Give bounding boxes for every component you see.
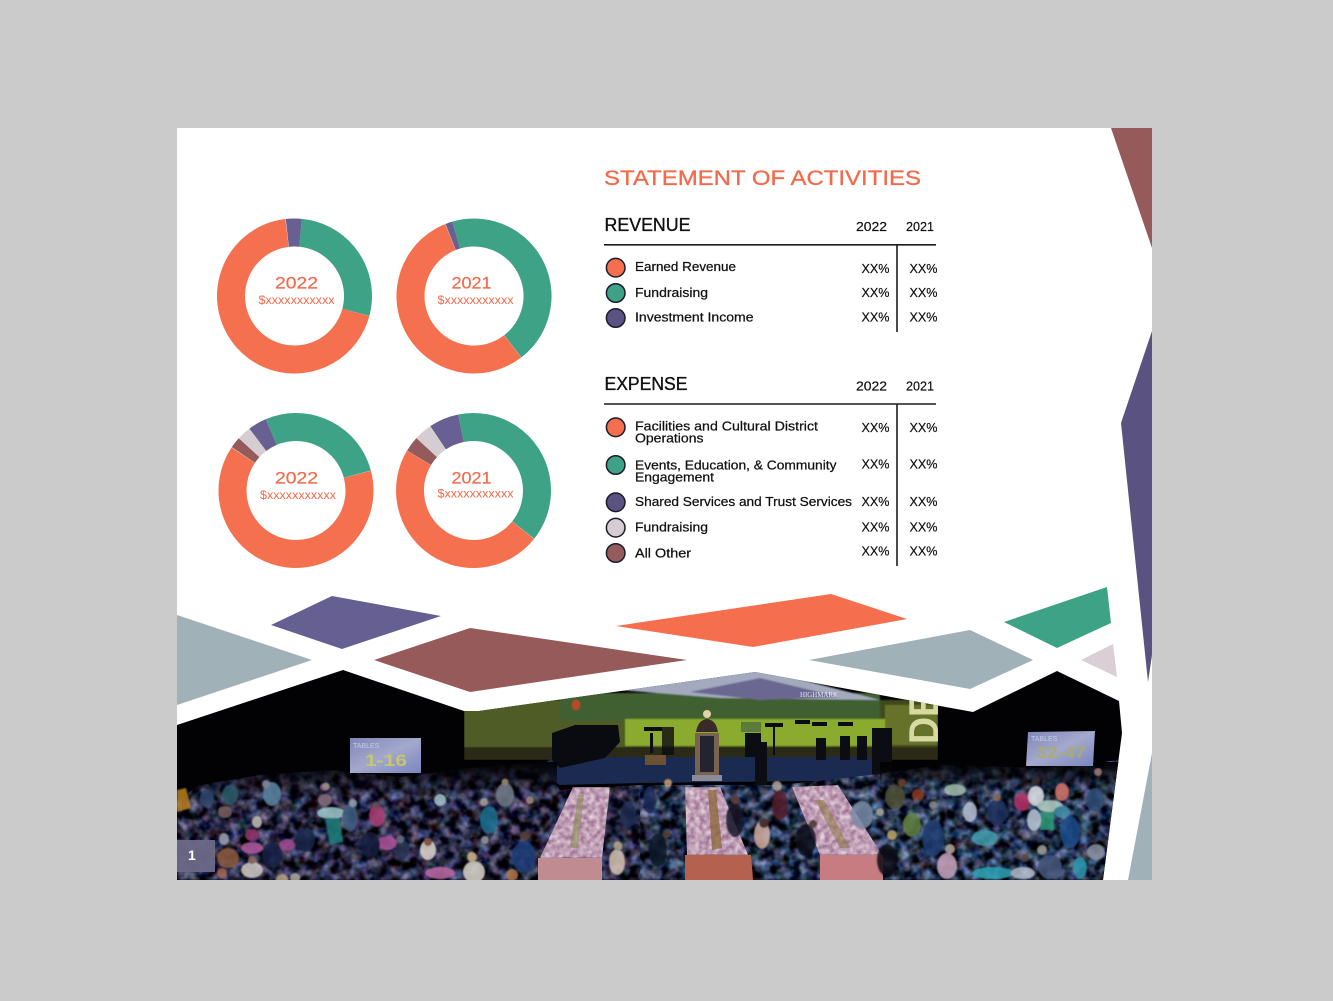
crowd top fade [177, 762, 557, 798]
row: fundraising: XX% [910, 285, 938, 300]
row: events: Events, Education, & Community [635, 457, 837, 472]
row: fundraising: Fundraising [635, 285, 708, 300]
row: earned revenue [606, 258, 938, 277]
crowd top fade right [880, 762, 1120, 792]
expense table [604, 374, 938, 566]
shape: bottom right slate [1128, 753, 1152, 880]
row: facilities: Operations [635, 431, 704, 446]
row: facilities: XX% [910, 420, 938, 435]
guests centre [609, 779, 884, 875]
donut: revenue 2022: $xxxxxxxxxxx [258, 293, 334, 307]
row: all other: All Other [635, 546, 692, 561]
row: all other [606, 543, 938, 562]
donut: expense 2021 [384, 401, 563, 580]
stage box [645, 755, 666, 765]
row: fundraising: Fundraising [635, 520, 708, 535]
right table screen: 32-47 [1036, 743, 1086, 762]
row: earned revenue: XX% [862, 261, 890, 276]
donut: revenue 2021: 2021 [452, 274, 492, 292]
expense heading: EXPENSE [604, 374, 688, 394]
left table screen: 1-16 [365, 751, 407, 770]
expense column years [856, 378, 934, 394]
shape: slate diamond [809, 630, 1033, 689]
row: all other: XX% [862, 543, 890, 558]
shape: top right brown [1111, 128, 1152, 248]
shape: left slate triangle [177, 615, 312, 705]
donut: revenue 2021: $xxxxxxxxxxx [438, 293, 514, 307]
donut: expense 2022: $xxxxxxxxxxx [260, 488, 336, 502]
backdrop lettering: DE [900, 692, 947, 744]
shape: pale triangle [1081, 644, 1117, 677]
expense column years: 2021 [906, 378, 934, 394]
shape: purple diamond [271, 596, 441, 649]
guests right [877, 768, 1105, 879]
donut: expense 2021: 2021 [452, 468, 492, 488]
row: investment income: XX% [862, 309, 890, 324]
revenue column years [856, 219, 934, 234]
shape: orange diamond [616, 594, 907, 647]
row: events: XX% [862, 457, 890, 472]
shape: green quad [1004, 587, 1111, 648]
stage floor [532, 757, 895, 785]
seated guests [177, 768, 1105, 886]
photo: gala dinner crowd [177, 660, 1127, 886]
revenue table [604, 215, 938, 332]
row: investment income [606, 309, 938, 327]
row: facilities [606, 418, 938, 446]
left table screen [350, 738, 421, 773]
shape: brown diamond [374, 628, 687, 692]
donut: expense 2022: 2022 [275, 468, 318, 488]
right table screen: TABLES [1031, 736, 1058, 743]
row: investment income: Investment Income [635, 309, 754, 324]
right table screen [1026, 731, 1095, 766]
row: fundraising [606, 284, 938, 302]
sponsor logo text: HIGHMARK [800, 691, 838, 699]
row: events: XX% [910, 457, 938, 472]
expense column years: 2022 [856, 378, 887, 394]
page number badge [177, 840, 215, 872]
row: fundraising: XX% [910, 520, 938, 535]
row: shared services: Shared Services and Trust Services [635, 494, 853, 509]
row: shared services: XX% [862, 494, 890, 509]
banquet tables [538, 785, 883, 880]
crowd texture centre and right [640, 760, 1120, 880]
row: all other: XX% [910, 543, 938, 558]
donut: revenue 2022: 2022 [275, 274, 318, 292]
grand piano [552, 725, 620, 768]
row: shared services [606, 493, 938, 512]
page canvas [177, 128, 1152, 880]
crowd texture left [177, 762, 660, 880]
row: shared services: XX% [910, 494, 938, 509]
row: fundraising [606, 518, 938, 537]
row: events [606, 456, 938, 484]
row: investment income: XX% [910, 309, 938, 324]
row: facilities: Facilities and Cultural District [635, 419, 818, 434]
shape: right purple [1121, 331, 1152, 682]
row: facilities: XX% [862, 420, 890, 435]
revenue heading: REVENUE [604, 215, 690, 235]
podium and speaker [692, 710, 722, 781]
row: fundraising: XX% [862, 285, 890, 300]
donut: revenue 2021 [385, 207, 563, 385]
left table screen: TABLES [353, 743, 380, 750]
stage backdrop projection [464, 668, 938, 760]
guests left [177, 778, 536, 886]
donut: revenue 2022 [217, 218, 372, 374]
page number badge: 1 [188, 847, 196, 863]
donut: expense 2021: $xxxxxxxxxxx [438, 486, 514, 500]
row: fundraising: XX% [862, 520, 890, 535]
row: earned revenue: Earned Revenue [635, 259, 736, 274]
white page panel [177, 128, 1152, 880]
music stands and stage gear [644, 720, 892, 790]
row: earned revenue: XX% [910, 261, 938, 276]
revenue column years: 2022 [856, 219, 887, 234]
donut: expense 2022 [206, 401, 386, 580]
revenue column years: 2021 [906, 219, 934, 234]
row: events: Engagement [635, 469, 714, 484]
title: STATEMENT OF ACTIVITIES [604, 167, 921, 190]
